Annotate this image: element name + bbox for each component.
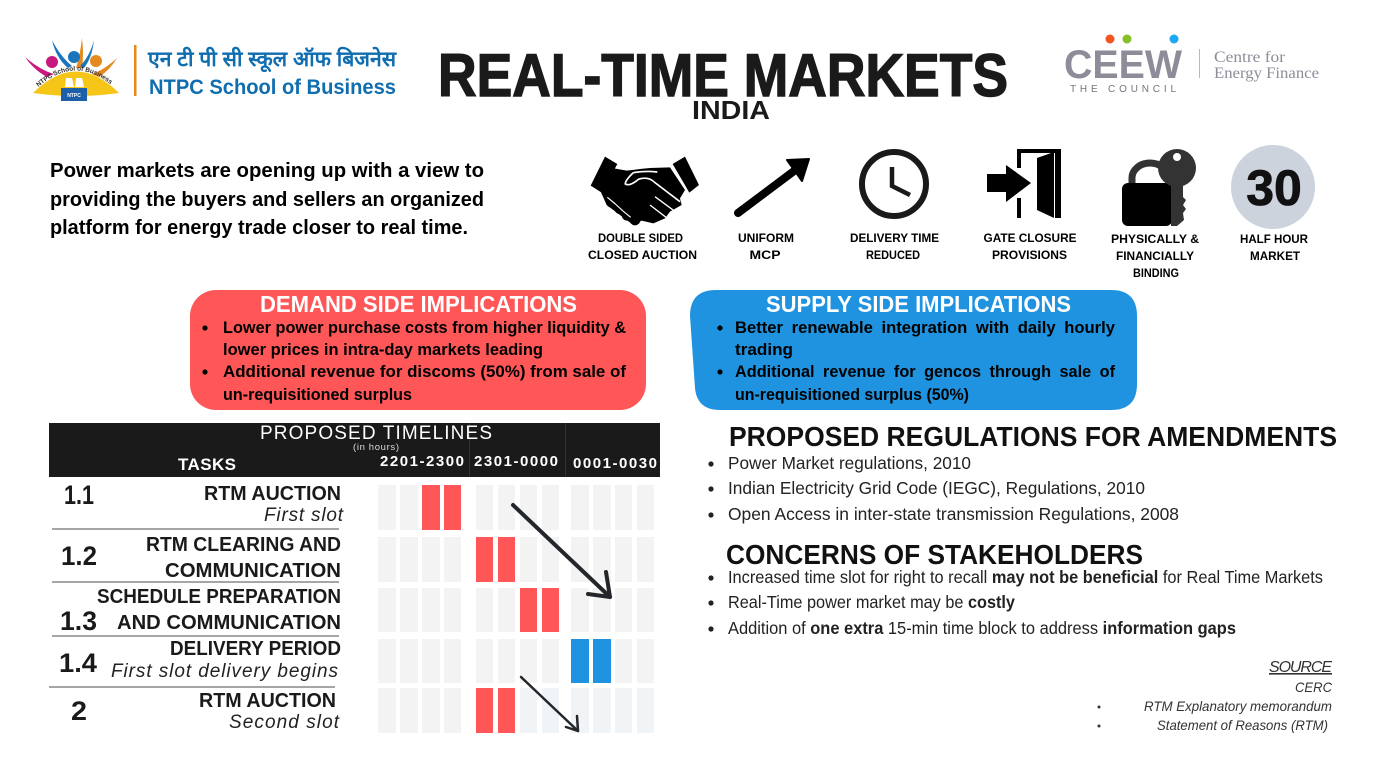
intro text: providing the buyers and sellers an organized <box>50 189 484 211</box>
source note: RTM Explanatory memorandum <box>1144 698 1332 714</box>
title: REAL-TIME MARKETS <box>438 42 1008 109</box>
logo: NTPC School of Business <box>25 38 397 101</box>
icon: handshake <box>591 157 699 225</box>
row 1.4 labels <box>59 638 341 682</box>
logo text english: NTPC School of Business <box>149 76 396 99</box>
logo divider <box>134 45 136 96</box>
gantt row 1.2 <box>378 537 654 582</box>
table header: 0001-0030 <box>573 455 657 472</box>
row 1.3 labels: 1.3 <box>60 606 97 636</box>
icon: diagonal arrow <box>738 159 809 213</box>
row 1.3 labels <box>60 586 341 636</box>
icon labels: DELIVERY TIME <box>850 231 939 245</box>
table header: PROPOSED TIMELINES <box>260 423 492 444</box>
icon labels: MARKET <box>1250 249 1301 263</box>
source note <box>1098 659 1333 733</box>
row 1.1 labels: 1.1 <box>64 480 94 510</box>
intro text: platform for energy trade closer to real time. <box>50 217 468 239</box>
row 1.4 labels: DELIVERY PERIOD <box>170 638 341 660</box>
gantt row 1.3 <box>378 588 654 632</box>
row 1.1 labels: First slot <box>264 505 344 526</box>
icon: 30 circle <box>1231 145 1315 229</box>
panel: supply side implications <box>690 290 1137 410</box>
panel: demand side implications: Lower power purchase costs from higher liquidity & <box>223 319 626 337</box>
row 1.3 labels: SCHEDULE PREPARATION <box>97 586 341 608</box>
panel: proposed timelines table <box>49 423 660 733</box>
intro text <box>50 160 484 239</box>
source note: SOURCE <box>1269 659 1332 676</box>
section: proposed regulations: Open Access in inter-state transmission Regulations, 2008 <box>728 504 1179 524</box>
section: proposed regulations: Power Market regulations, 2010 <box>728 453 971 473</box>
row 2 labels: 2 <box>71 696 87 726</box>
source note: Statement of Reasons (RTM) <box>1157 717 1328 733</box>
row dividers <box>49 528 339 688</box>
arrow: second slot flow <box>521 677 578 731</box>
table header: 2201-2300 <box>380 453 464 470</box>
row 2 labels: RTM AUCTION <box>199 690 336 712</box>
icon labels: DOUBLE SIDED <box>598 231 683 245</box>
panel: demand side implications: un-requisitioned surplus <box>223 386 412 404</box>
section: concerns of stakeholders <box>708 539 1323 638</box>
heading: supply side: SUPPLY SIDE IMPLICATIONS <box>766 291 1071 317</box>
icon: door with arrow <box>987 149 1061 218</box>
icon labels: HALF HOUR <box>1240 232 1308 246</box>
row 1.4 labels: 1.4 <box>59 648 97 678</box>
logo text hindi: एन टी पी सी स्कूल ऑफ बिजनेस <box>147 46 397 73</box>
section: concerns of stakeholders: Addition of one extra 15-min time block to address information gaps <box>728 618 1236 638</box>
gantt row 1.4 <box>378 639 654 683</box>
logo: CEEW Centre for Energy Finance: CEEW <box>1064 43 1182 87</box>
icon labels: UNIFORM <box>738 231 794 245</box>
section: proposed regulations: Indian Electricity Grid Code (IEGC), Regulations, 2010 <box>728 478 1145 498</box>
logo emblem: NTPC School of Business <box>36 66 112 87</box>
gantt row 2 <box>378 688 654 733</box>
panel: demand side implications: Additional revenue for discoms (50%) from sale of <box>223 363 627 381</box>
row 1.1 labels: RTM AUCTION <box>204 483 341 505</box>
arrow: first slot flow <box>513 505 610 597</box>
icon labels: CLOSED AUCTION <box>588 248 697 262</box>
row 1.2 labels <box>61 534 341 582</box>
panel: supply side implications: un-requisitioned surplus (50%) <box>735 386 969 404</box>
table header <box>49 423 660 477</box>
gantt row 1.1 <box>378 485 654 530</box>
icon labels: MCP <box>750 248 780 262</box>
intro text: Power markets are opening up with a view to <box>50 160 484 182</box>
icon: lock and key <box>1122 149 1196 226</box>
icon labels: BINDING <box>1133 266 1179 280</box>
table header: TASKS <box>178 455 236 474</box>
row 2 labels <box>71 690 340 733</box>
panel: supply side implications: Additional revenue for gencos through sale of <box>735 363 1115 381</box>
table header: (in hours) <box>353 442 399 453</box>
row 1.4 labels: First slot delivery begins <box>111 661 338 682</box>
row 1.3 labels: AND COMMUNICATION <box>117 612 341 634</box>
logo: CEEW Centre for Energy Finance: THE COUNCIL <box>1070 84 1176 95</box>
logo: CEEW Centre for Energy Finance: Centre for <box>1214 49 1286 66</box>
row 1.2 labels: RTM CLEARING AND <box>146 534 341 556</box>
source note: CERC <box>1295 679 1333 695</box>
row 2 labels: Second slot <box>229 712 340 733</box>
subtitle: INDIA <box>692 95 770 125</box>
table header: 2301-0000 <box>474 453 558 470</box>
logo emblem: NTPC <box>67 93 81 99</box>
logo: CEEW Centre for Energy Finance: Energy Finance <box>1214 65 1319 82</box>
icon: 30 circle: 30 <box>1246 160 1302 216</box>
row 1.2 labels: 1.2 <box>61 541 97 571</box>
panel: demand side implications: lower prices in intra-day markets leading <box>223 341 543 359</box>
section: concerns of stakeholders: Real-Time power market may be costly <box>728 592 1015 612</box>
panel: demand side implications <box>190 290 646 410</box>
heading: demand side: DEMAND SIDE IMPLICATIONS <box>260 291 577 317</box>
panel: supply side implications: trading <box>735 341 793 359</box>
logo: CEEW Centre for Energy Finance <box>1064 34 1319 95</box>
row 1.1 labels <box>64 480 344 526</box>
icon labels: PHYSICALLY & <box>1111 232 1199 246</box>
icon: clock <box>862 152 926 216</box>
heading: proposed regulations: PROPOSED REGULATIONS FOR AMENDMENTS <box>729 421 1337 452</box>
row 1.2 labels: COMMUNICATION <box>165 560 341 582</box>
gantt chart <box>378 485 654 733</box>
section: proposed regulations <box>708 421 1337 524</box>
panel: supply side implications: Better renewable integration with daily hourly <box>735 319 1116 337</box>
icon labels: FINANCIALLY <box>1116 249 1194 263</box>
heading: concerns: CONCERNS OF STAKEHOLDERS <box>726 539 1143 570</box>
icon labels: GATE CLOSURE <box>984 231 1076 245</box>
logo emblem <box>25 38 119 101</box>
section: concerns of stakeholders: Increased time slot for right to recall may not be beneficial for Real Time Markets <box>728 567 1323 587</box>
icon labels <box>588 231 1308 280</box>
icon labels: PROVISIONS <box>992 248 1067 262</box>
icon labels: REDUCED <box>866 248 920 262</box>
